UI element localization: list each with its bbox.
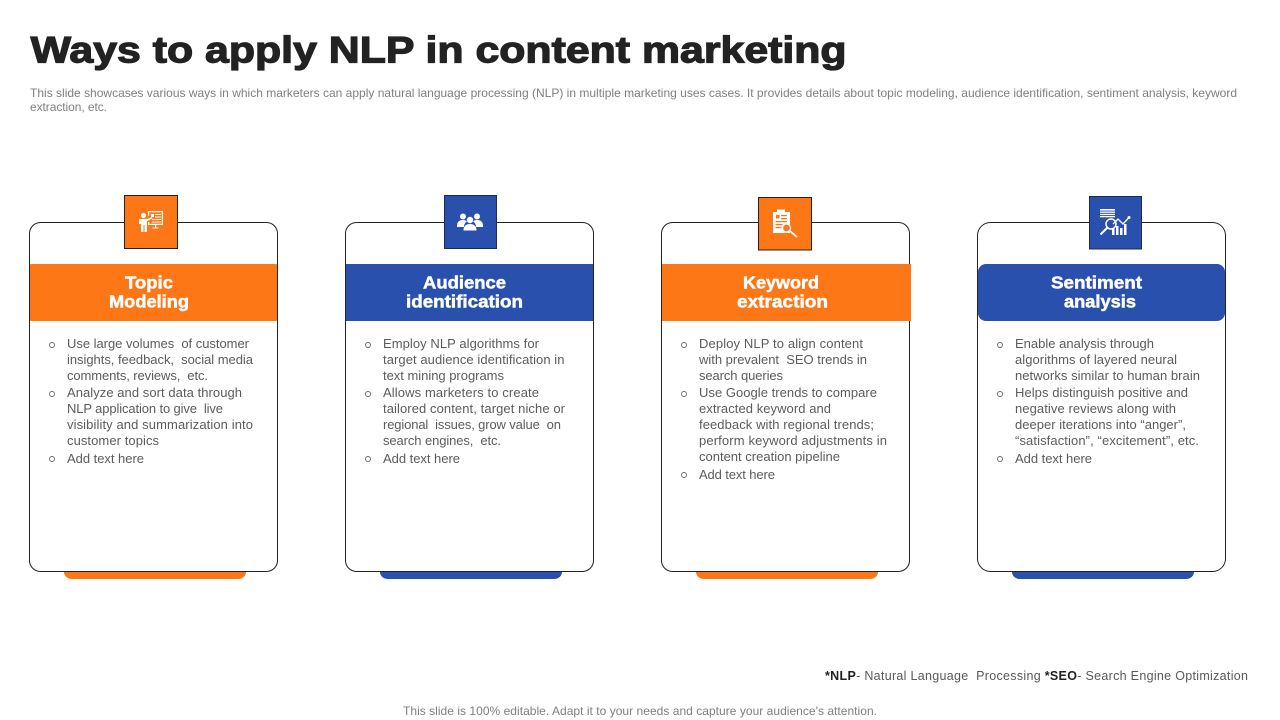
card outline: [978, 222, 1226, 572]
bullet list: Add text here: [67, 451, 144, 466]
bullet list: negative reviews along with: [1015, 401, 1176, 416]
bullet list: “satisfaction”, “excitement”, etc.: [1015, 433, 1199, 448]
footnote: abbreviations: *NLP- Natural Language Processing *SEO- Search Engine Optimization: [825, 669, 1248, 683]
bullet list: extracted keyword and: [699, 401, 831, 416]
bullet list: Use Google trends to compare: [699, 385, 877, 400]
bullet list: [366, 336, 566, 466]
bullet list: Use large volumes of customer: [67, 336, 250, 351]
header band: Topic: [125, 273, 173, 293]
icon: data analysis chart: [1090, 196, 1142, 249]
bullet list: tailored content, target niche or: [383, 401, 566, 416]
foot bar: [696, 572, 878, 579]
icon: clipboard with magnifier: [758, 198, 812, 250]
bullet list: NLP application to give live: [67, 401, 223, 416]
bullet list: algorithms of layered neural: [1015, 352, 1177, 367]
card outline: [30, 222, 278, 572]
subtitle text block: [30, 86, 1237, 114]
bullet list: Enable analysis through: [1015, 336, 1154, 351]
bullet list: regional issues, grow value on: [383, 417, 561, 432]
header band: analysis: [1064, 292, 1136, 312]
foot bar: [1012, 572, 1194, 579]
foot bar: [64, 572, 246, 579]
bullet list: deeper iterations into “anger”,: [1015, 417, 1186, 432]
title: Ways to apply NLP in content marketing: [31, 30, 847, 70]
bullet list: Add text here: [699, 467, 775, 482]
icon: group of people: [444, 196, 496, 248]
bullet list: Deploy NLP to align content: [699, 336, 863, 351]
bullet list: Add text here: [383, 451, 460, 466]
bullet list: perform keyword adjustments in: [699, 433, 887, 448]
card outline: [346, 222, 594, 572]
bullet list: search engines, etc.: [383, 433, 501, 448]
bullet list: insights, feedback, social media: [67, 352, 254, 367]
panel: keyword extraction: [662, 198, 911, 579]
foot bar: [380, 572, 562, 579]
bullet list: Allows marketers to create: [383, 385, 539, 400]
panel: topic modeling: [30, 196, 278, 579]
subtitle text block: extraction, etc.: [30, 100, 107, 114]
bullet list: [998, 336, 1200, 466]
bullet list: visibility and summarization into: [67, 417, 253, 432]
bullet list: [682, 336, 887, 482]
bullet list: text mining programs: [383, 368, 504, 383]
bullet list: content creation pipeline: [699, 449, 840, 464]
header band: identification: [406, 292, 523, 312]
panel: sentiment analysis: [978, 196, 1226, 579]
bullet list: with prevalent SEO trends in: [698, 352, 867, 367]
bullet list: networks similar to human brain: [1015, 368, 1200, 383]
bullet list: feedback with regional trends;: [699, 417, 874, 432]
card outline: [662, 222, 910, 572]
header band: extraction: [737, 292, 828, 312]
bullet list: comments, reviews, etc.: [67, 368, 208, 383]
bullet list: Analyze and sort data through: [67, 385, 242, 400]
header band: [978, 264, 1225, 321]
header band: [30, 264, 277, 321]
bullet list: Helps distinguish positive and: [1015, 385, 1188, 400]
bullet list: search queries: [699, 368, 784, 383]
bullet list: customer topics: [67, 433, 160, 448]
subtitle text block: This slide showcases various ways in which marketers can apply natural language processing (NLP) in multiple marketing uses cases. It provides details about topic modeling, audience identification, sentiment analysis, keyword: [30, 86, 1237, 100]
bullet list: Add text here: [1015, 451, 1092, 466]
bullet list: [50, 336, 254, 466]
header band: Audience: [423, 273, 506, 293]
header band: [346, 264, 593, 321]
header band: [662, 264, 911, 321]
header band: Modeling: [109, 292, 189, 312]
icon: presenter at screen: [124, 196, 178, 248]
bullet list: Employ NLP algorithms for: [383, 336, 540, 351]
header band: Sentiment: [1051, 273, 1142, 293]
header band: Keyword: [743, 273, 819, 293]
panel: audience identification: [346, 196, 594, 579]
bullet list: target audience identification in: [383, 352, 564, 367]
editable note: This slide is 100% editable. Adapt it to your needs and capture your audience's attention.: [403, 704, 877, 718]
